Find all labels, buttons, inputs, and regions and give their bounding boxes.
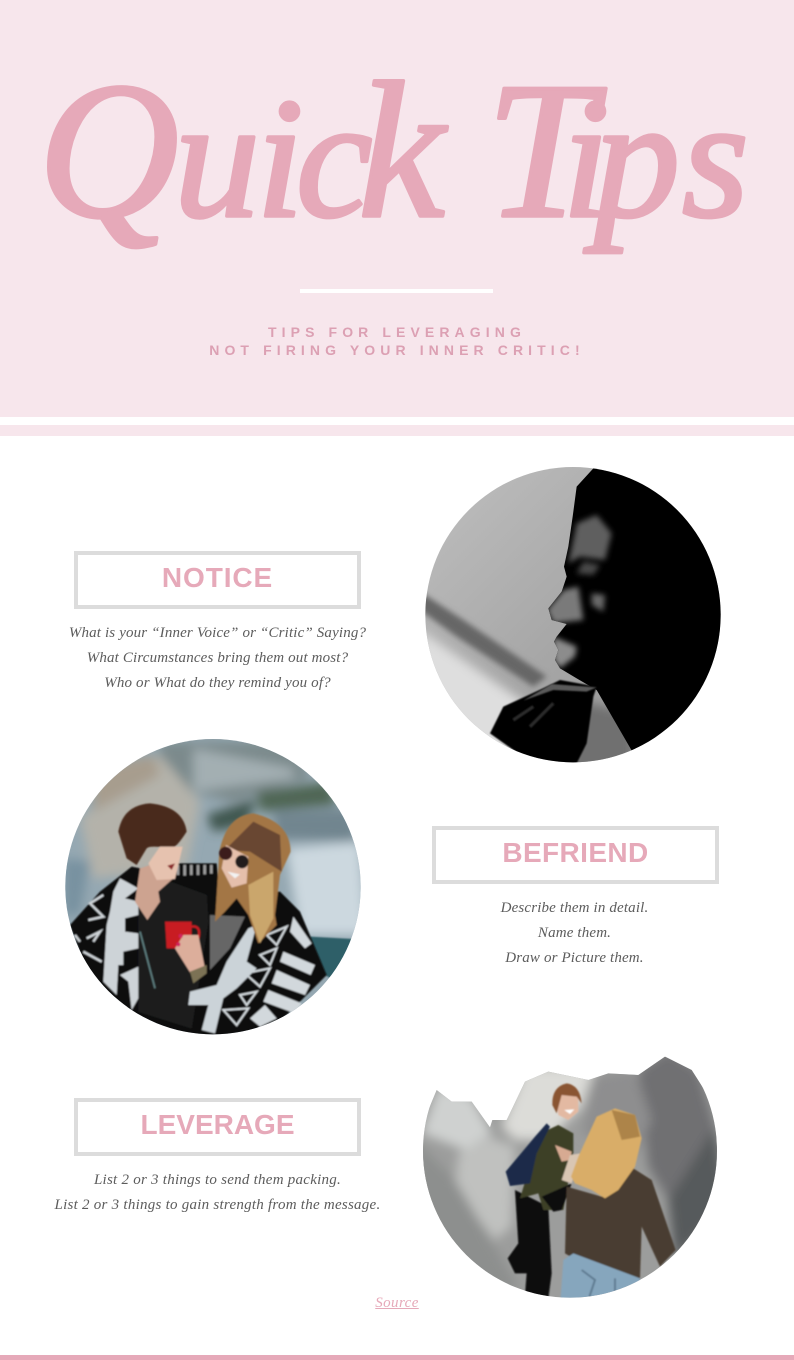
text: notice questions: What is your “Inner Voice” or “Critic” Saying? <box>69 625 366 641</box>
title: i <box>562 64 610 254</box>
title: i <box>256 64 304 254</box>
heading: befriend <box>432 826 719 884</box>
title: T <box>486 43 606 259</box>
title <box>38 43 749 259</box>
title: Q <box>38 43 179 259</box>
subtitle: TIPS FOR LEVERAGING <box>268 324 526 340</box>
photo: thoughtful man <box>425 467 721 762</box>
footer bar <box>0 1355 794 1360</box>
title: s <box>682 64 749 254</box>
source link: Source <box>375 1295 419 1311</box>
heading: leverage <box>74 1098 361 1156</box>
text: leverage steps: List 2 or 3 things to gain strength from the message. <box>55 1197 380 1213</box>
photo: hikers holding hands <box>423 1056 717 1298</box>
text: befriend steps: Draw or Picture them. <box>505 950 644 966</box>
text: notice questions <box>69 625 366 691</box>
header panel <box>0 0 794 417</box>
text: befriend steps: Name them. <box>538 925 611 941</box>
subtitle: NOT FIRING YOUR INNER CRITIC! <box>209 342 585 358</box>
title: p <box>583 64 680 254</box>
heading: befriend: BEFRIEND <box>502 837 649 868</box>
panel: leverage <box>54 1098 380 1213</box>
text: leverage steps <box>54 1172 380 1213</box>
title: c <box>296 64 372 254</box>
title divider <box>300 289 493 293</box>
header lower band <box>0 425 794 436</box>
panel: befriend <box>432 826 719 966</box>
text: befriend steps: Describe them in detail. <box>501 900 648 916</box>
heading: notice <box>74 551 361 609</box>
text: notice questions: Who or What do they remind you of? <box>104 675 331 691</box>
text: leverage steps: List 2 or 3 things to send them packing. <box>94 1172 341 1188</box>
title: k <box>358 43 448 259</box>
text: befriend steps <box>500 900 648 966</box>
panel: notice <box>69 551 366 691</box>
text: notice questions: What Circumstances bring them out most? <box>87 650 348 666</box>
heading: leverage: LEVERAGE <box>140 1109 295 1140</box>
subtitle <box>209 324 585 358</box>
heading: notice: NOTICE <box>162 562 273 593</box>
photo: two friends with red mug <box>65 739 361 1034</box>
title: u <box>174 64 260 254</box>
